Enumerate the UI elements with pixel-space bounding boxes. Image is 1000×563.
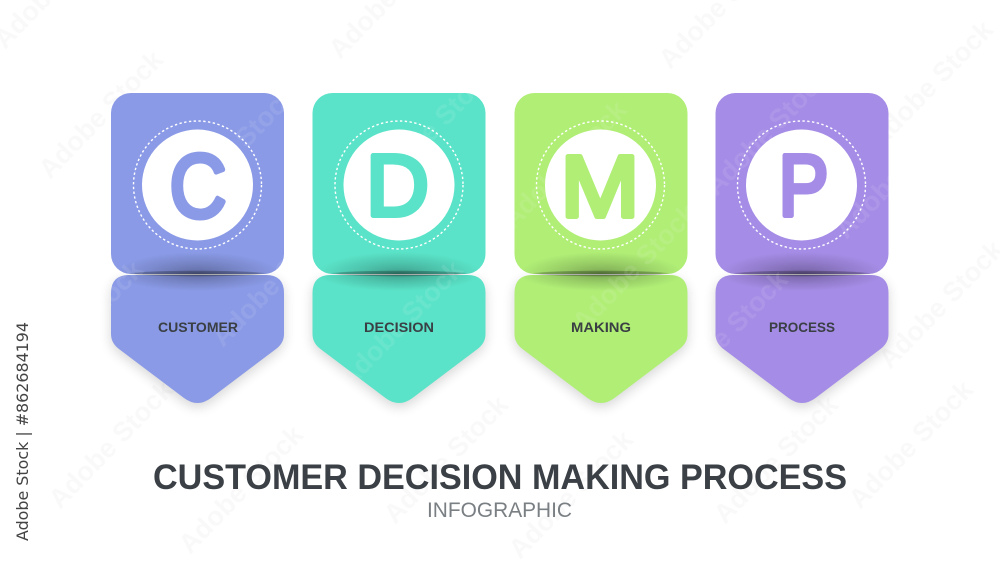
card watermark C: Adobe Stock xyxy=(166,79,303,219)
dashed ring M xyxy=(536,121,664,249)
dashed ring D xyxy=(335,121,463,249)
label CUSTOMER: CUSTOMER xyxy=(158,319,238,335)
stock id: Adobe Stock | #862684194 xyxy=(13,322,32,541)
dashed ring C xyxy=(134,121,262,249)
watermark: faint background text: Adobe Stock xyxy=(43,374,180,514)
watermark: faint background text: Adobe Stock xyxy=(33,44,170,184)
letter M: M xyxy=(560,138,639,236)
card watermark D: Adobe Stock xyxy=(332,254,469,394)
subtitle: INFOGRAPHIC xyxy=(427,499,572,522)
card watermark P: Adobe Stock xyxy=(699,61,836,201)
card watermark D xyxy=(332,57,502,394)
panel: M Making xyxy=(496,93,703,407)
watermark: faint background text: Adobe Stock xyxy=(843,374,980,514)
fold shadow D xyxy=(328,255,470,288)
panel: P Process xyxy=(711,93,893,411)
bottom arrow D xyxy=(312,275,486,403)
label MAKING: MAKING xyxy=(571,319,631,335)
dashed ring P xyxy=(738,121,866,249)
card watermark M: Adobe Stock xyxy=(496,94,633,234)
watermark: faint background text: Adobe Stock xyxy=(708,389,845,529)
watermark: faint background text: Adobe Stock xyxy=(378,389,515,529)
top card D xyxy=(312,93,486,274)
fold shadow P xyxy=(731,255,873,289)
bottom arrow M xyxy=(514,275,688,403)
letter C: C xyxy=(170,137,226,237)
top card P xyxy=(716,93,888,274)
watermark: faint background text: Adobe Stock xyxy=(863,14,1000,154)
letter D: D xyxy=(366,138,429,234)
letter P: P xyxy=(778,138,828,234)
badge circle D xyxy=(344,130,454,240)
card watermark D: Adobe Stock xyxy=(365,57,502,197)
card watermark M xyxy=(496,94,703,337)
label DECISION: DECISION xyxy=(364,319,434,335)
fold shadow M xyxy=(530,255,672,289)
bottom arrow P xyxy=(716,275,888,403)
badge circle M xyxy=(545,130,656,240)
label PROCESS: PROCESS xyxy=(769,319,835,335)
watermark: faint background text: Adobe Stock xyxy=(173,419,310,559)
badge circle P xyxy=(746,130,857,240)
card watermark P xyxy=(657,61,966,404)
title: CUSTOMER DECISION MAKING PROCESS xyxy=(153,458,847,497)
watermark: faint background text: Adobe Stock xyxy=(503,424,640,563)
fold shadow C xyxy=(126,255,268,289)
card watermark C: Adobe Stock xyxy=(13,254,150,394)
card watermark P: Adobe Stock xyxy=(829,104,966,244)
top card M xyxy=(514,93,688,274)
card watermark C xyxy=(13,79,343,394)
panel: C Customer xyxy=(13,79,343,407)
card watermark C: Adobe Stock xyxy=(206,212,343,352)
card watermark P: Adobe Stock xyxy=(657,264,794,404)
card watermark M: Adobe Stock xyxy=(566,197,703,337)
panel: D Decision xyxy=(308,93,490,411)
badge circle C xyxy=(142,130,253,240)
bottom arrow C xyxy=(111,275,284,403)
top card C xyxy=(111,93,284,274)
